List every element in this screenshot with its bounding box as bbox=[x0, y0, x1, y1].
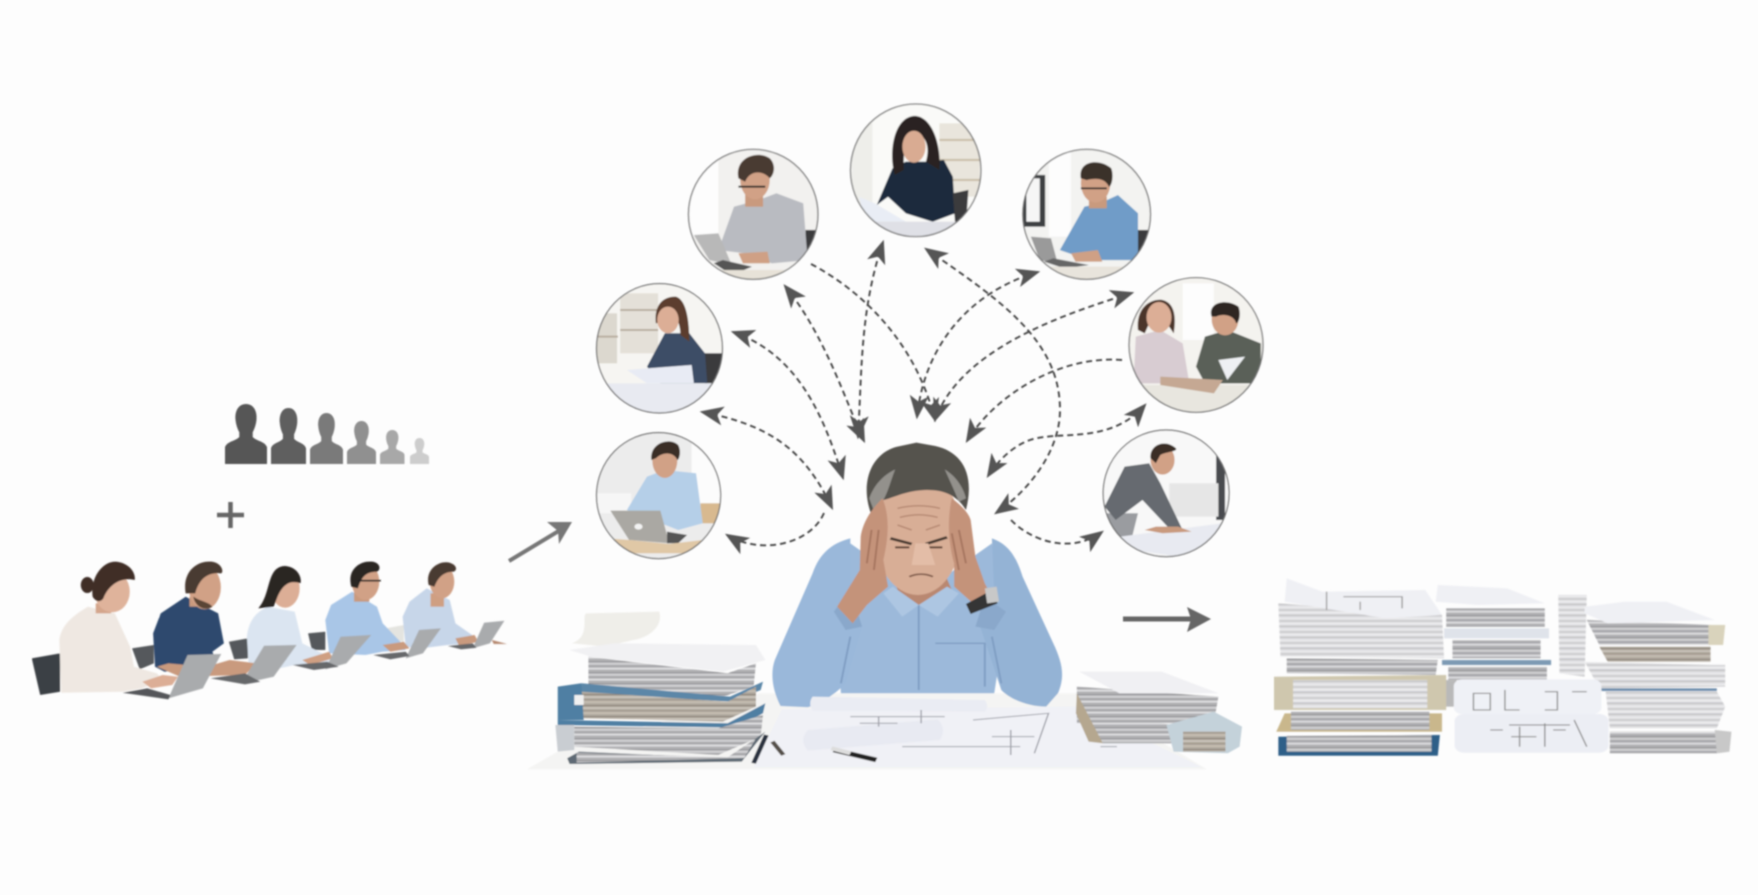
person: woman with long dark hair bbox=[229, 566, 371, 670]
person: man in navy shirt bbox=[132, 561, 297, 684]
portrait: woman navy blouse, top bbox=[848, 103, 982, 238]
team at the long table bbox=[32, 561, 507, 699]
icon: silhouette 2 bbox=[271, 408, 306, 464]
arrow: right pair to centre bbox=[967, 360, 1122, 441]
arrow: middle-left link bbox=[733, 332, 843, 478]
stack A: tall binders and plans bbox=[1274, 578, 1446, 756]
portrait: man at laptop, lower left bbox=[596, 432, 723, 560]
right desk document stack bbox=[1076, 672, 1242, 753]
man's hands and wrist bbox=[837, 498, 999, 623]
arrow: lower-left link bbox=[702, 412, 832, 508]
output stacks at right bbox=[1274, 578, 1731, 756]
person: man with glasses in blue shirt bbox=[308, 561, 441, 659]
arrow: reviewer to output bbox=[1123, 607, 1211, 632]
portrait ring middle left bbox=[597, 284, 722, 413]
rolled drawings bbox=[1454, 679, 1609, 753]
arrow: to lower-left reviewer bbox=[727, 513, 824, 545]
portrait ring lower right bbox=[1103, 430, 1229, 557]
arrow: right pair lower link bbox=[988, 405, 1145, 476]
arrow: right link bbox=[935, 293, 1132, 420]
central scene: overwhelmed man at desk bbox=[527, 443, 1242, 769]
icon: silhouette 1 bbox=[225, 404, 267, 464]
stack C: right pile with binders bbox=[1558, 595, 1731, 753]
arrow: team to reviewers bbox=[509, 522, 572, 561]
portrait: woman with documents, middle left bbox=[596, 283, 725, 413]
person: woman in white blouse bbox=[32, 562, 221, 699]
man's head bbox=[867, 443, 969, 595]
portrait: pair at table, middle right bbox=[1128, 277, 1264, 413]
arrow: top long link bbox=[926, 249, 1060, 513]
icon: silhouette 4 bbox=[347, 421, 376, 464]
icon: plus sign bbox=[217, 502, 244, 528]
arrow: upper-left to centre bbox=[811, 264, 935, 420]
stack B: middle pile bbox=[1436, 585, 1551, 707]
blueprint sheets bbox=[754, 697, 1202, 767]
arrow: to lower-right reviewer bbox=[1011, 520, 1102, 544]
portrait ring middle right bbox=[1129, 278, 1263, 412]
arrow: top link bbox=[858, 242, 883, 437]
infographic canvas bbox=[31, 102, 1732, 768]
desk surface bbox=[527, 693, 1207, 769]
icon: silhouette 6 bbox=[410, 438, 429, 464]
silhouettes: shrinking team icons bbox=[225, 404, 429, 464]
arrow: upper-right link bbox=[917, 272, 1038, 417]
man's shirt and arms bbox=[772, 538, 1062, 707]
portrait ring upper left bbox=[688, 149, 818, 279]
reviewer portrait circles bbox=[596, 103, 1264, 560]
portrait: man bending over plans, lower right bbox=[1102, 429, 1232, 558]
portrait ring lower left bbox=[597, 433, 721, 559]
arrow: upper-left link bbox=[785, 286, 864, 441]
icon: silhouette 5 bbox=[380, 430, 404, 464]
person: man in pale blue shirt bbox=[386, 562, 507, 649]
portrait: man blue shirt, upper right bbox=[1022, 148, 1154, 280]
left document stack bbox=[555, 612, 765, 764]
icon: silhouette 3 bbox=[310, 413, 343, 464]
dashed communication arrows bbox=[702, 242, 1145, 545]
portrait ring top bbox=[851, 104, 981, 237]
portrait: man grey shirt, upper left bbox=[687, 148, 819, 282]
portrait ring upper right bbox=[1023, 149, 1150, 279]
